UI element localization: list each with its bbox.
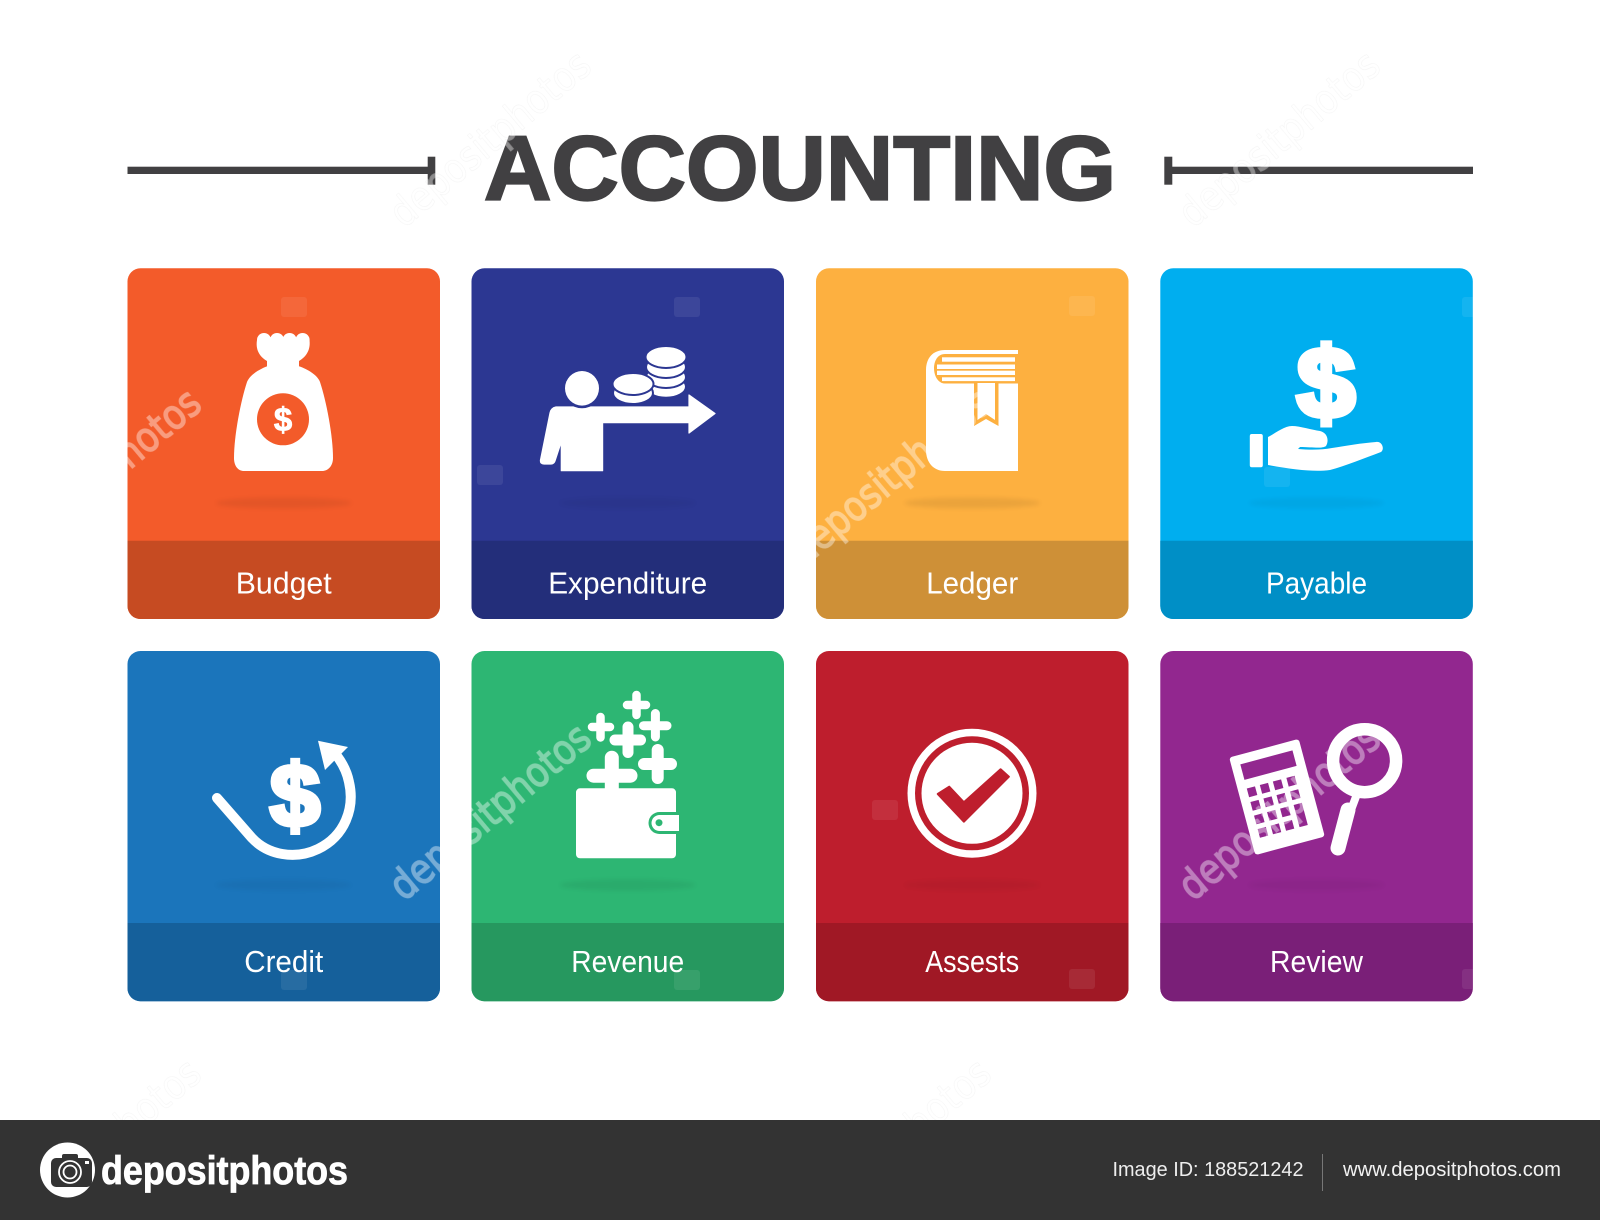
watermark outlines on white background: depositphotos [1169,40,1389,237]
logo wordmark: depositphotos [101,1149,348,1193]
label: Ledger: Ledger [926,566,1018,600]
card: Revenue [472,651,784,1001]
label: Credit: Credit [244,944,324,979]
watermark camera marks [281,296,1488,990]
label: Budget: Budget [236,566,332,600]
card: Budget [128,268,440,619]
icon: dollar with rising arrow [217,741,351,855]
icon: money bag [234,333,333,471]
icon: money bag: $ [274,401,292,438]
icon: book with bookmark [926,350,1019,471]
label: Assests: Assests [925,944,1019,979]
watermarks: depositphotos [380,713,600,910]
card: Assests [816,651,1128,1001]
icon: dollar with rising arrow: $ [270,746,320,845]
image id: Image ID: 188521242 [1112,1158,1304,1181]
icon: calculator and magnifier [1229,729,1396,855]
footer bar [0,1120,1600,1220]
icon: check mark badge [908,729,1036,858]
watermarks: depositphotos [1169,40,1389,237]
title rule: left [128,157,435,185]
watermarks: depositphotos [780,378,1000,575]
icon: person with coins and arrow [540,346,715,471]
icon: wallet with plus signs [576,695,679,858]
card: Ledger [816,268,1128,619]
label: Payable: Payable [1266,566,1367,600]
label: Expenditure: Expenditure [548,566,707,600]
watermarks: depositphotos [1169,713,1389,910]
icon: hand holding dollar [1250,327,1383,471]
watermark outlines on white background: depositphotos [380,40,600,237]
card: Credit [128,651,440,1001]
icon: camera logo [40,1142,95,1198]
watermarks: depositphotos [380,40,600,237]
website url: www.depositphotos.com [1342,1158,1561,1181]
icon: hand holding dollar: $ [1297,327,1355,438]
card: Payable [1160,268,1473,619]
card: Review [1160,651,1473,1001]
card: Expenditure [472,268,784,619]
label: Review: Review [1270,944,1364,979]
title rule: right [1164,157,1473,185]
title: ACCOUNTING [484,118,1116,220]
label: Revenue: Revenue [571,944,684,979]
